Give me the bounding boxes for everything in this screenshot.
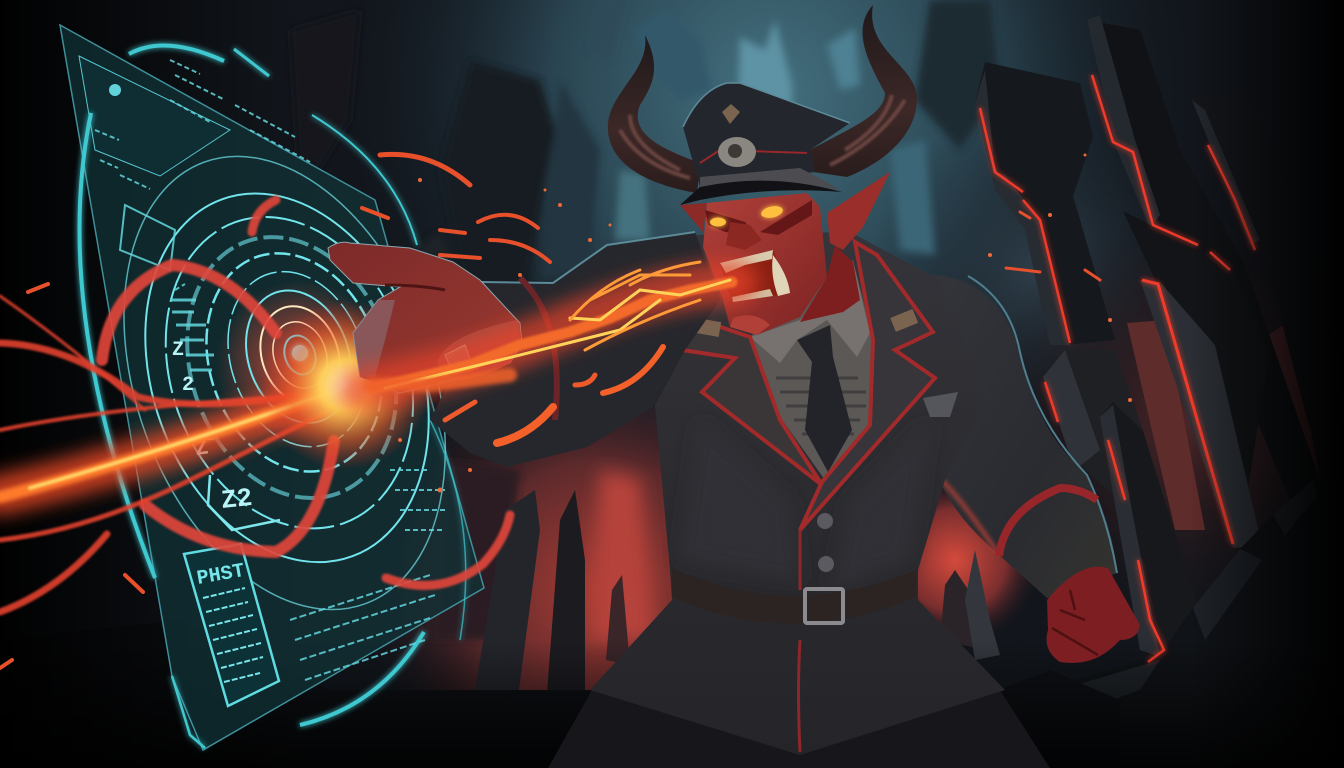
cap band — [700, 168, 840, 190]
distant rock spires — [290, 0, 1000, 640]
flying embers — [0, 154, 1100, 668]
cap visor — [680, 181, 842, 205]
sleeve cuff strip — [520, 278, 557, 420]
buttons — [817, 513, 834, 572]
shirt collar — [750, 262, 870, 363]
belt — [672, 568, 917, 624]
belt buckle — [805, 589, 843, 623]
coat shading — [680, 420, 930, 590]
palm highlight — [353, 300, 395, 377]
ember sparks — [398, 154, 1132, 492]
cap chevron — [722, 104, 740, 124]
extended arm sleeve — [430, 232, 720, 467]
chin — [730, 315, 770, 335]
impact core — [260, 300, 430, 470]
pointing hand — [328, 242, 522, 393]
left ear sliver — [680, 203, 707, 232]
glyph labels on panel — [172, 339, 254, 516]
panel data card: PHST — [195, 560, 247, 591]
glyph labels on panel: 2 — [205, 427, 215, 445]
red energy swirls — [102, 200, 510, 585]
energy glow behind rings — [215, 280, 385, 450]
upper teeth — [720, 250, 773, 273]
right arm sleeve — [925, 275, 1117, 598]
fang — [772, 255, 790, 296]
trousers — [548, 690, 1050, 768]
demon officer figure — [328, 83, 1140, 768]
red cuff band — [999, 488, 1097, 556]
cap badge — [718, 137, 756, 167]
clenched fist — [1046, 567, 1140, 663]
officer cap crown — [683, 83, 850, 187]
brow shadow — [705, 200, 812, 235]
cap rim highlight — [683, 83, 850, 127]
glyph labels on panel: Z2 — [220, 483, 254, 516]
mouth — [720, 250, 790, 302]
floor rocks — [0, 620, 1120, 768]
nose — [726, 222, 762, 250]
shirt — [750, 260, 872, 480]
thumb nail — [445, 345, 472, 372]
flame breath — [360, 262, 735, 443]
neck — [800, 245, 860, 322]
panel data card — [184, 544, 279, 706]
bracket around Z2 — [208, 475, 280, 530]
foreground rubble — [1040, 480, 1344, 768]
front seam — [798, 530, 800, 752]
cap red piping — [700, 150, 807, 163]
concentric target rings — [65, 111, 504, 654]
right rock pillars with glowing red cracks — [975, 15, 1344, 768]
glyph labels on panel: 2 — [182, 374, 194, 397]
rim light on arm — [968, 276, 1117, 573]
breast pocket badge — [923, 392, 958, 417]
glyph labels on panel: Z — [193, 435, 210, 462]
glyph labels on panel: Z — [172, 339, 184, 362]
cyan frame arcs — [79, 45, 466, 748]
rust coloured recesses — [1127, 320, 1205, 530]
lower center spires over red glow — [470, 470, 1000, 720]
arm rim light — [480, 232, 695, 283]
schematic details — [95, 60, 445, 680]
lower teeth — [732, 289, 773, 302]
torso and coat — [590, 232, 1005, 755]
thumb — [437, 320, 520, 380]
left lapel — [682, 320, 822, 485]
horns behind cap — [608, 5, 917, 193]
collar pins — [695, 309, 918, 337]
glowing eyes — [710, 204, 784, 226]
necktie — [797, 325, 852, 472]
face — [703, 193, 827, 335]
fire streams left — [0, 296, 350, 612]
holographic schematic panel — [60, 25, 510, 750]
right lapel — [800, 242, 935, 530]
pointed ear — [827, 172, 890, 250]
cap badge centre — [728, 144, 742, 158]
red glow on arm underside — [940, 478, 998, 554]
bright bullseye — [292, 345, 308, 361]
glowing cracks — [980, 75, 1255, 662]
